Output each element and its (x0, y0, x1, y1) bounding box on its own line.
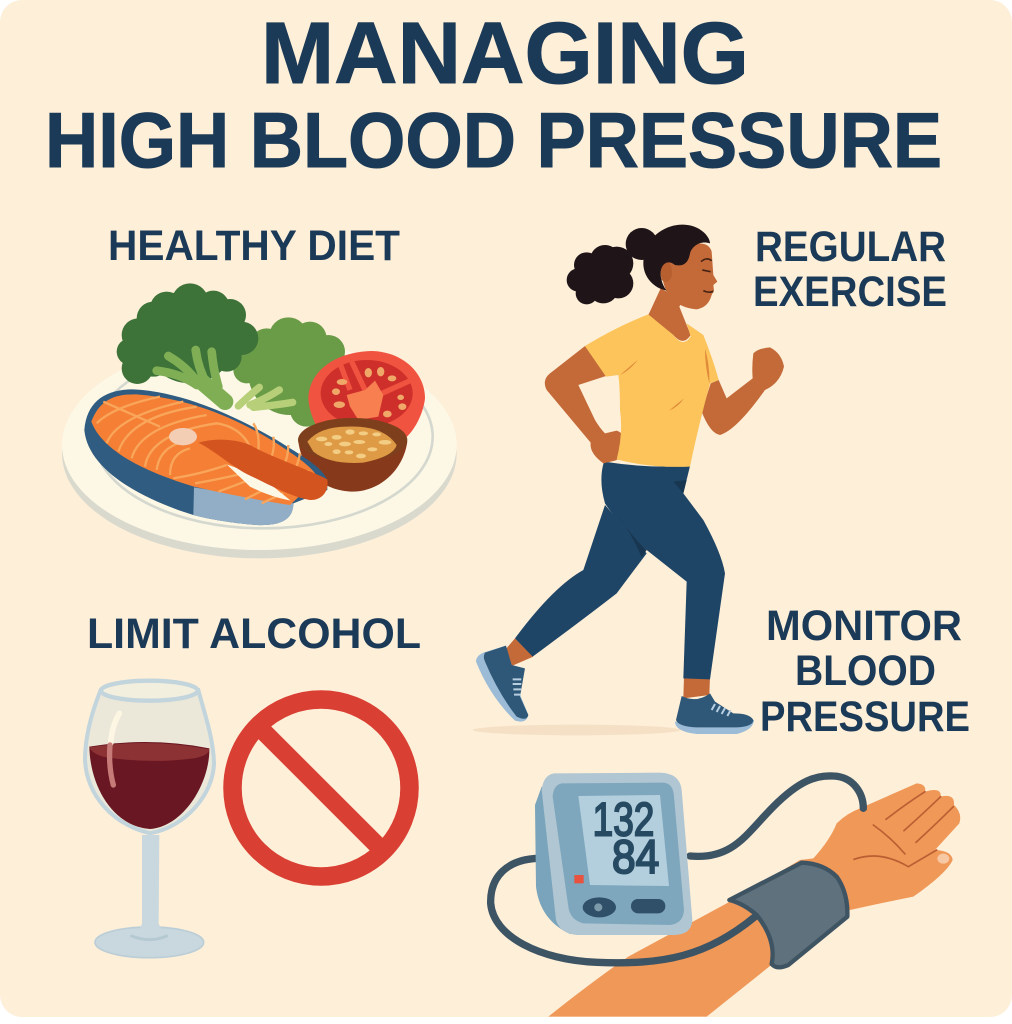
forearm and hand (548, 783, 960, 1017)
left shoe (476, 646, 528, 722)
heading: monitor blood pressure (760, 602, 970, 741)
plate (62, 340, 457, 558)
front arm (702, 347, 784, 435)
heading: regular exercise: EXERCISE (753, 268, 947, 316)
heading: monitor blood pressure: BLOOD (795, 647, 936, 695)
food plate illustration (62, 283, 457, 558)
icon: prohibition sign (232, 700, 410, 876)
ankles (505, 638, 710, 698)
shirt (585, 314, 719, 467)
panel: healthy diet (62, 222, 457, 558)
title: HIGH BLOOD PRESSURE (45, 96, 942, 184)
tomato (308, 351, 425, 438)
panel: regular exercise (473, 223, 947, 735)
monitor device (535, 773, 692, 935)
heading: monitor blood pressure: PRESSURE (760, 693, 970, 741)
runner illustration (473, 225, 784, 735)
title: MANAGING (261, 5, 749, 102)
broccoli (117, 283, 345, 427)
blood pressure monitor and arm illustration (491, 773, 960, 1017)
wine glass (85, 681, 214, 958)
rear arm (545, 346, 629, 463)
heading: regular exercise: REGULAR (755, 223, 946, 271)
tubing (491, 776, 863, 963)
readout: 84 (612, 831, 659, 884)
hair and ponytail (567, 225, 710, 304)
screen (578, 795, 669, 886)
leggings (515, 462, 725, 679)
title (45, 5, 942, 184)
heading: regular exercise (753, 223, 947, 316)
buttons (583, 897, 665, 917)
salmon steak (84, 389, 328, 525)
cuff (729, 863, 847, 967)
readout: 132 (593, 793, 654, 846)
readout (593, 793, 659, 884)
right shoe (675, 693, 754, 734)
ground shadow (473, 725, 681, 735)
panel: limit alcohol (85, 610, 421, 958)
neck (648, 288, 691, 341)
indicator light (574, 875, 584, 883)
bowl of grains (298, 418, 407, 492)
head (661, 243, 717, 309)
heading: healthy diet: HEALTHY DIET (108, 222, 400, 270)
heading: limit alcohol: LIMIT ALCOHOL (87, 610, 421, 658)
panel: monitor blood pressure (491, 602, 970, 1017)
heading: monitor blood pressure: MONITOR (766, 602, 962, 650)
